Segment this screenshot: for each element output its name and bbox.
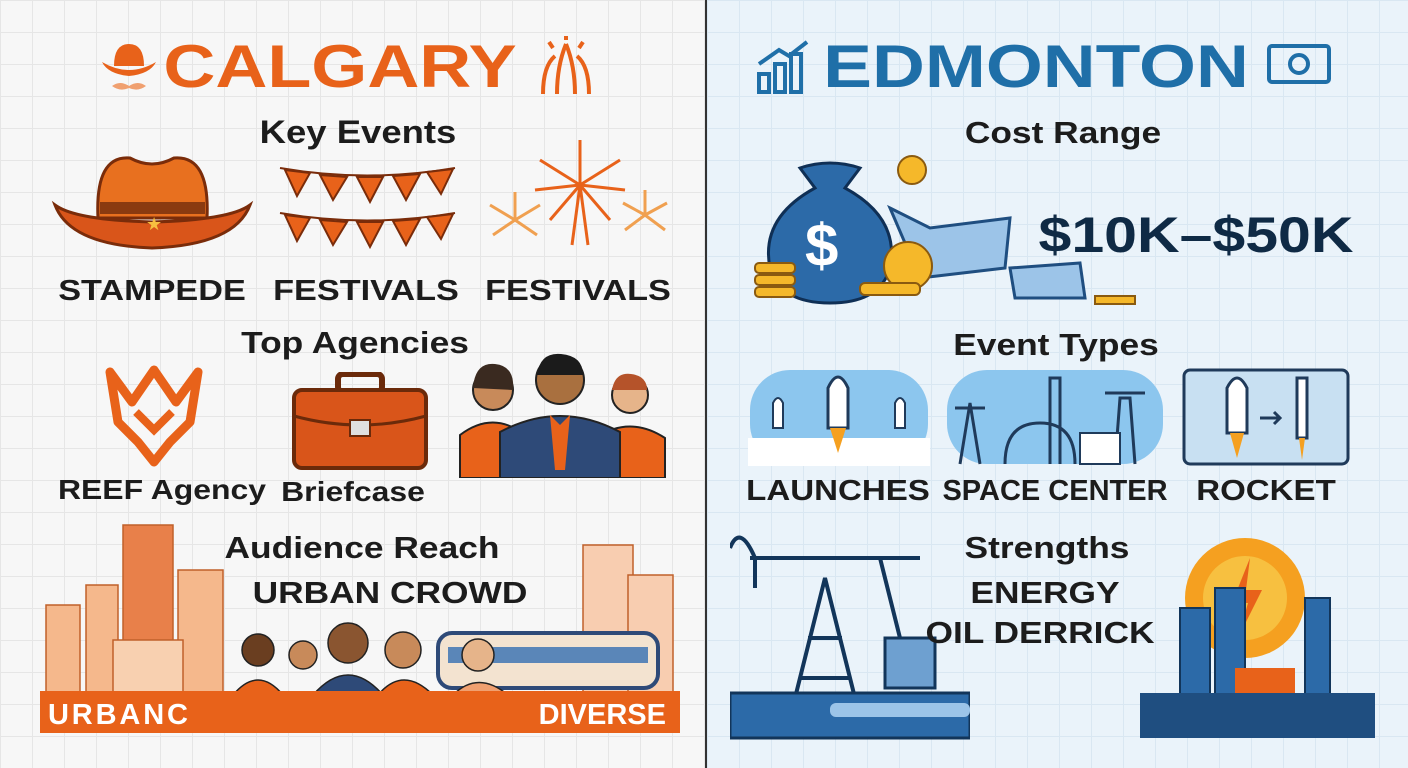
icon: cowboy hat small [102,44,156,90]
illustration: calgary skyline and crowd: URBANC [48,699,188,731]
text: oil derrick: OIL DERRICK [925,615,1155,650]
panel: edmonton background [705,0,1408,768]
icon: chart [757,40,808,94]
label: launches: LAUNCHES [746,475,930,507]
label: reef agency: REEF Agency [58,474,266,505]
label: space center: SPACE CENTER [942,475,1168,507]
text: cost value: $10K–$50K [1039,207,1353,263]
icon: rocket panel [1182,368,1350,466]
icon: stampede hat: ★ [146,214,162,234]
heading: audience reach: Audience Reach [225,530,499,565]
illustration: money bag [754,155,1136,305]
label: rocket: ROCKET [1196,475,1336,507]
label: briefcase: Briefcase [281,476,425,507]
illustration: energy [1140,538,1375,738]
icon: banners [280,167,456,249]
title: calgary: CALGARY [163,33,517,100]
icon: briefcase [292,372,428,470]
text: urban crowd: URBAN CROWD [253,575,527,610]
icon: people [459,354,666,478]
icon: space center panel [947,370,1163,465]
label: festivals 1: FESTIVALS [273,275,459,307]
heading: event types: Event Types [953,327,1159,362]
illustration: money bag: $ [805,212,838,279]
heading: key events: Key Events [260,114,456,150]
icon: reef logo [106,366,202,466]
label: stampede: STAMPEDE [58,275,246,307]
title: edmonton: EDMONTON [823,33,1249,100]
heading: top agencies: Top Agencies [241,325,469,360]
icon: fireworks small [541,36,591,94]
icon: money [1267,44,1331,84]
label: festivals 2: FESTIVALS [485,275,671,307]
heading: cost range: Cost Range [965,115,1161,150]
panel: calgary background [0,0,705,768]
icon: fireworks [489,140,668,246]
illustration: calgary skyline and crowd: DIVERSE [539,699,666,731]
illustration: oil pump [730,536,970,740]
text: energy: ENERGY [970,575,1120,610]
illustration: calgary skyline and crowd [40,524,680,733]
icon: launches panel [748,370,930,466]
heading: strengths: Strengths [965,530,1129,565]
icon: stampede hat [52,156,254,250]
